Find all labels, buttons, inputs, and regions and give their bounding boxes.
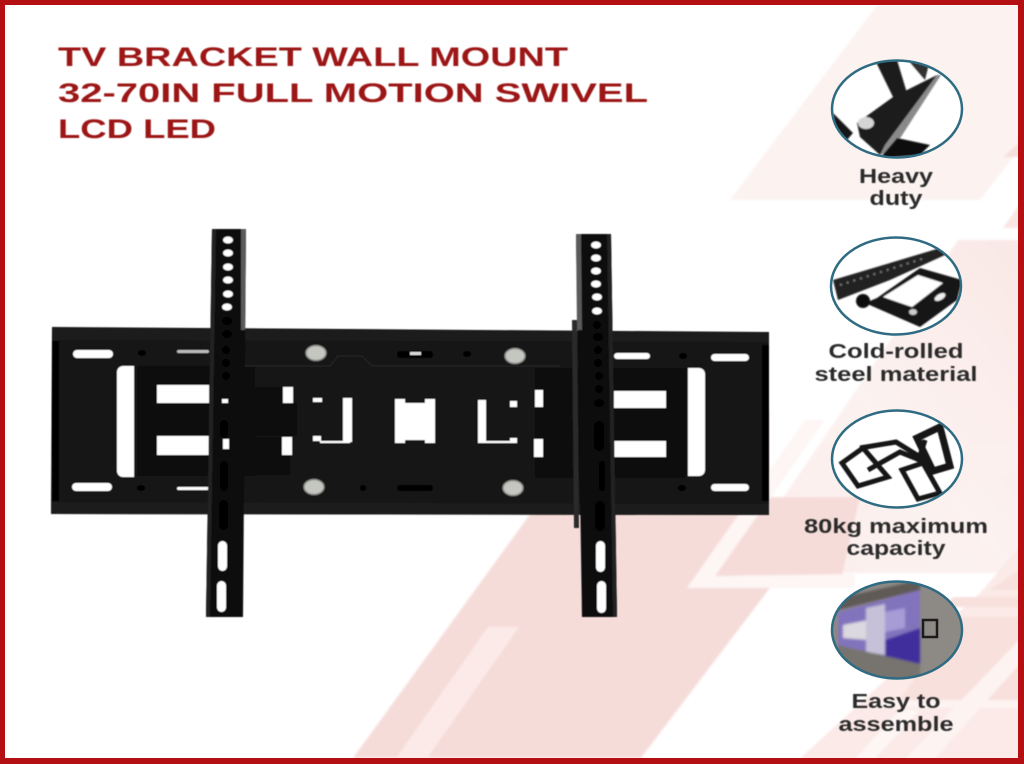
- label: Easy to: [852, 691, 940, 713]
- label: capacity: [846, 538, 947, 560]
- label: Cold-rolled: [828, 341, 964, 363]
- right vertical strap: [572, 234, 617, 617]
- icon: steel plate close-up: [831, 238, 962, 334]
- feature: heavy duty: [832, 60, 962, 210]
- label: 80kg maximum: [804, 516, 988, 538]
- title: [58, 42, 648, 144]
- left vertical strap: [206, 229, 246, 617]
- label: duty: [870, 188, 924, 210]
- label: [859, 166, 934, 210]
- feature: 80kg capacity: [804, 410, 988, 560]
- white cut-outs in plate: [72, 350, 749, 491]
- mounting bolts: [304, 346, 525, 496]
- icon: mounted TV on wall: [830, 580, 962, 680]
- label: [804, 516, 988, 560]
- icon: bracket arm close-up: [832, 60, 962, 158]
- label: [814, 341, 978, 386]
- title: 32-70IN FULL MOTION SWIVEL: [58, 78, 648, 108]
- title: TV BRACKET WALL MOUNT: [58, 42, 569, 72]
- plate small holes: [137, 350, 687, 491]
- feature: cold-rolled steel: [814, 238, 978, 386]
- label: [838, 691, 954, 736]
- label: assemble: [838, 714, 954, 736]
- title: LCD LED: [58, 114, 216, 144]
- label: steel material: [814, 364, 978, 386]
- label: Heavy: [859, 166, 934, 188]
- feature: easy to assemble: [830, 580, 962, 736]
- product: wall mount bracket: [51, 229, 769, 617]
- swing arm parts in cut-outs: [137, 366, 686, 476]
- back plate: [51, 327, 769, 515]
- icon: extended arm mount: [832, 410, 962, 508]
